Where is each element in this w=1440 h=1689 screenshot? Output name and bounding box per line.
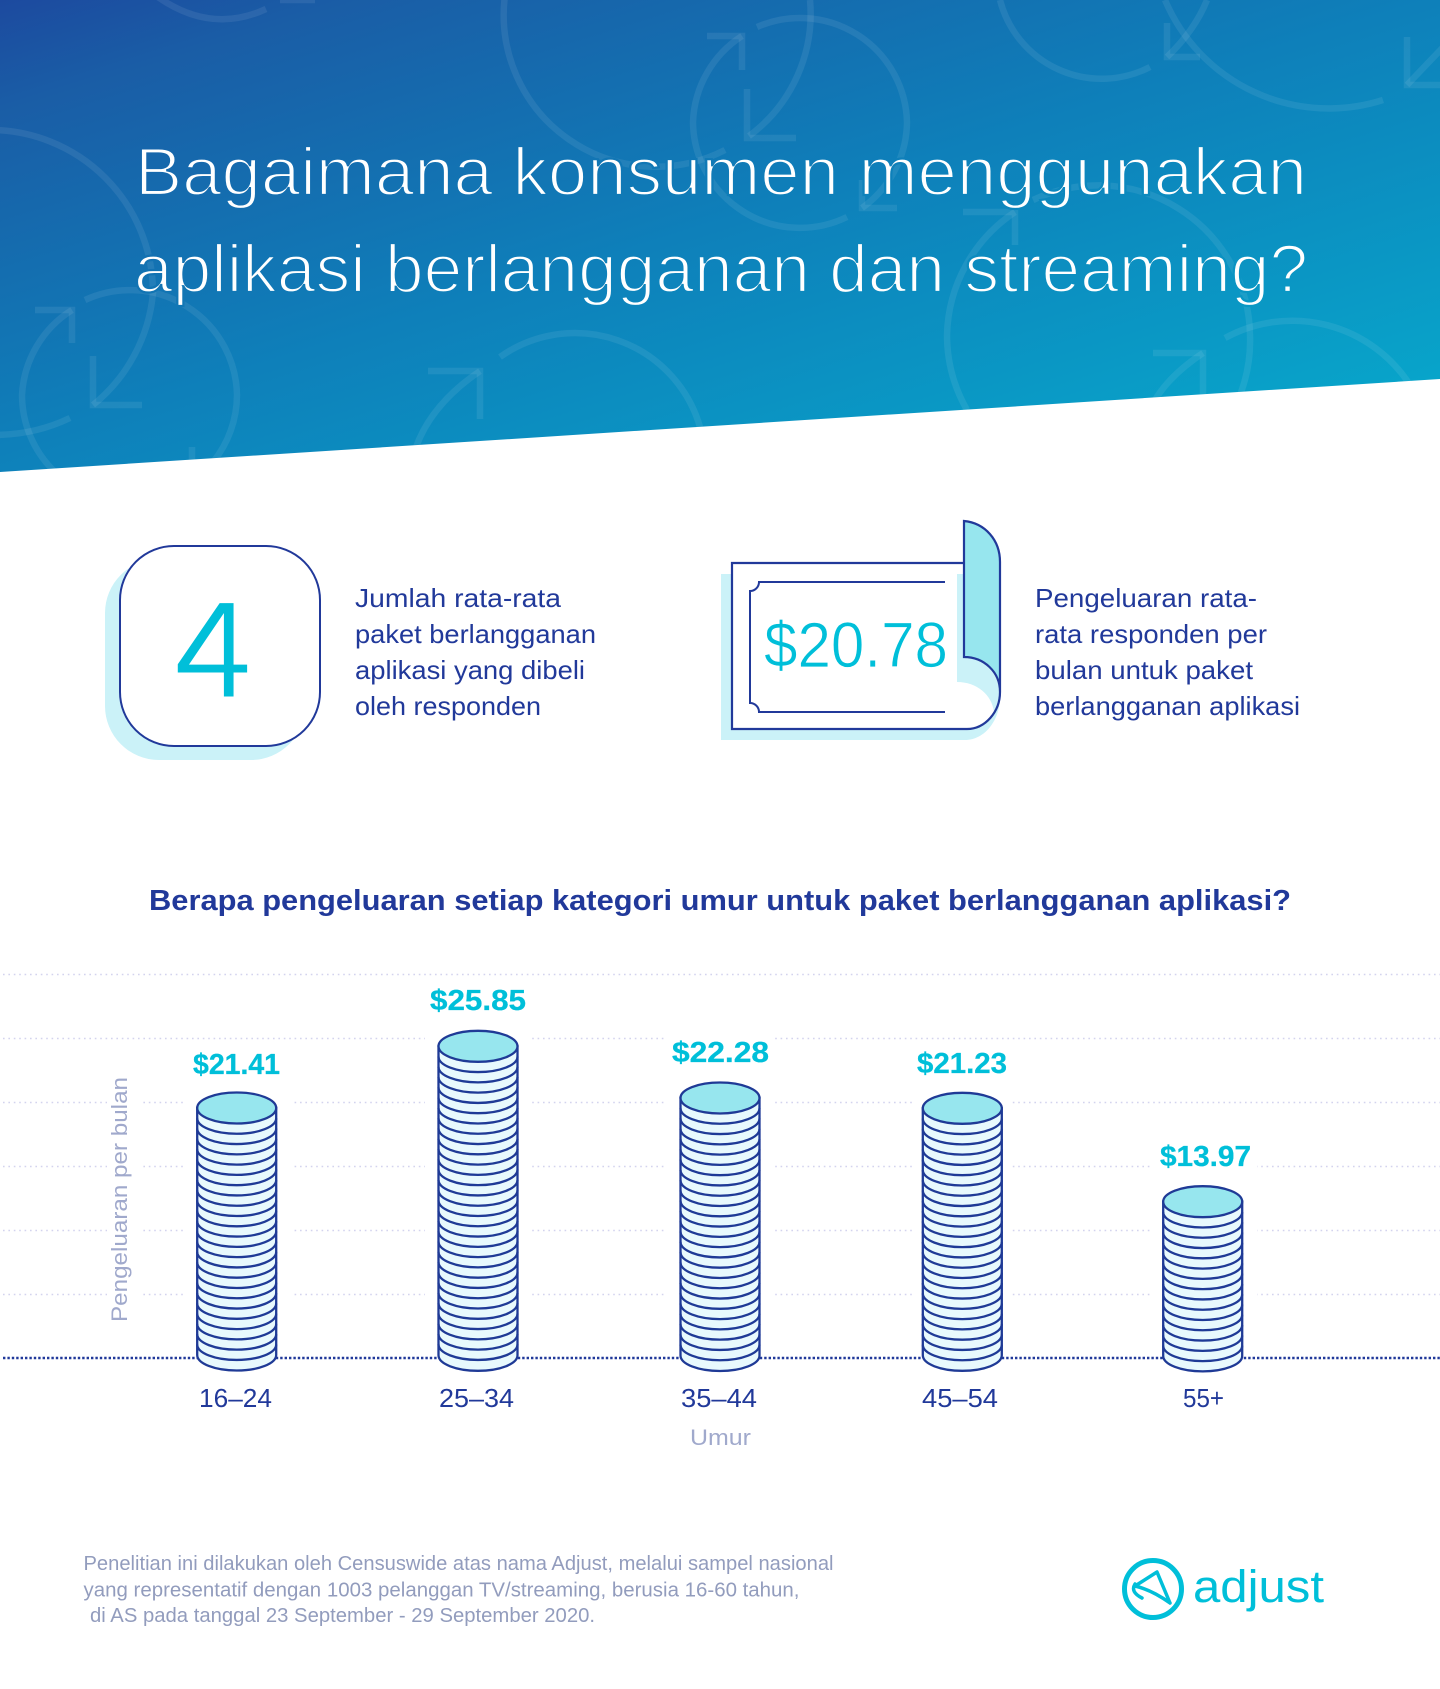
stat panel: average monthly spend [721, 521, 1300, 740]
source note: Penelitian ini dilakukan oleh Censuswide atas nama Adjust, melalui sampel nasional [84, 1553, 833, 1575]
coin stack [197, 1092, 276, 1370]
source note: di AS pada tanggal 23 September - 29 September 2020. [90, 1605, 595, 1627]
chart heading: Berapa pengeluaran setiap kategori umur untuk paket berlangganan aplikasi? [149, 885, 1291, 917]
age label: 55+ [1183, 1383, 1224, 1413]
x axis label: Umur [690, 1425, 751, 1450]
bar: 35–44 [672, 1037, 769, 1413]
icon: curled bill with $20.78: $20.78 [764, 609, 948, 681]
bar: 45–54 [917, 1048, 1007, 1413]
background refresh-arrow pattern [0, 0, 1440, 472]
icon: rounded square with number 4 [105, 546, 320, 760]
stat description: oleh responden [355, 691, 541, 721]
stat description: berlangganan aplikasi [1035, 691, 1300, 721]
value label: $21.41 [193, 1049, 280, 1081]
coin stack [438, 1031, 518, 1371]
stat description: paket berlangganan [355, 619, 596, 649]
source note [84, 1553, 833, 1627]
icon: curled bill with $20.78 [721, 521, 1000, 740]
title [134, 134, 1308, 307]
stat description: aplikasi yang dibeli [355, 655, 585, 685]
title: Bagaimana konsumen menggunakan [135, 134, 1307, 210]
stat description: Pengeluaran rata- [1035, 583, 1257, 613]
age label: 35–44 [681, 1383, 757, 1413]
y axis label: Pengeluaran per bulan [107, 1077, 132, 1322]
coin stack [1163, 1186, 1242, 1371]
value label: $13.97 [1160, 1141, 1251, 1173]
coin stack [680, 1082, 760, 1371]
bar: 16–24 [193, 1049, 280, 1413]
stat description [1035, 583, 1300, 721]
coin stack [923, 1093, 1002, 1371]
stat description: bulan untuk paket [1035, 655, 1254, 685]
age label: 16–24 [199, 1383, 272, 1413]
icon: rounded square with number 4: 4 [173, 581, 256, 725]
logo wordmark: adjust [1193, 1561, 1325, 1612]
value label: $25.85 [430, 985, 526, 1017]
title: aplikasi berlangganan dan streaming? [134, 231, 1308, 307]
stat panel: average number of subscriptions [105, 546, 596, 760]
logo mark [1124, 1560, 1182, 1618]
value label: $22.28 [672, 1037, 769, 1069]
value label: $21.23 [917, 1048, 1007, 1080]
bar: 55+ [1160, 1141, 1251, 1413]
bar chart: spending by age group [3, 974, 1440, 1450]
age label: 45–54 [922, 1383, 998, 1413]
source note: yang representatif dengan 1003 pelanggan TV/streaming, berusia 16-60 tahun, [84, 1580, 800, 1602]
bar: 25–34 [430, 985, 526, 1413]
stat description: Jumlah rata-rata [355, 583, 562, 613]
stat description [355, 583, 596, 721]
stat description: rata responden per [1035, 619, 1267, 649]
logo: Adjust [1124, 1560, 1325, 1618]
header banner [0, 0, 1440, 472]
age label: 25–34 [439, 1383, 514, 1413]
